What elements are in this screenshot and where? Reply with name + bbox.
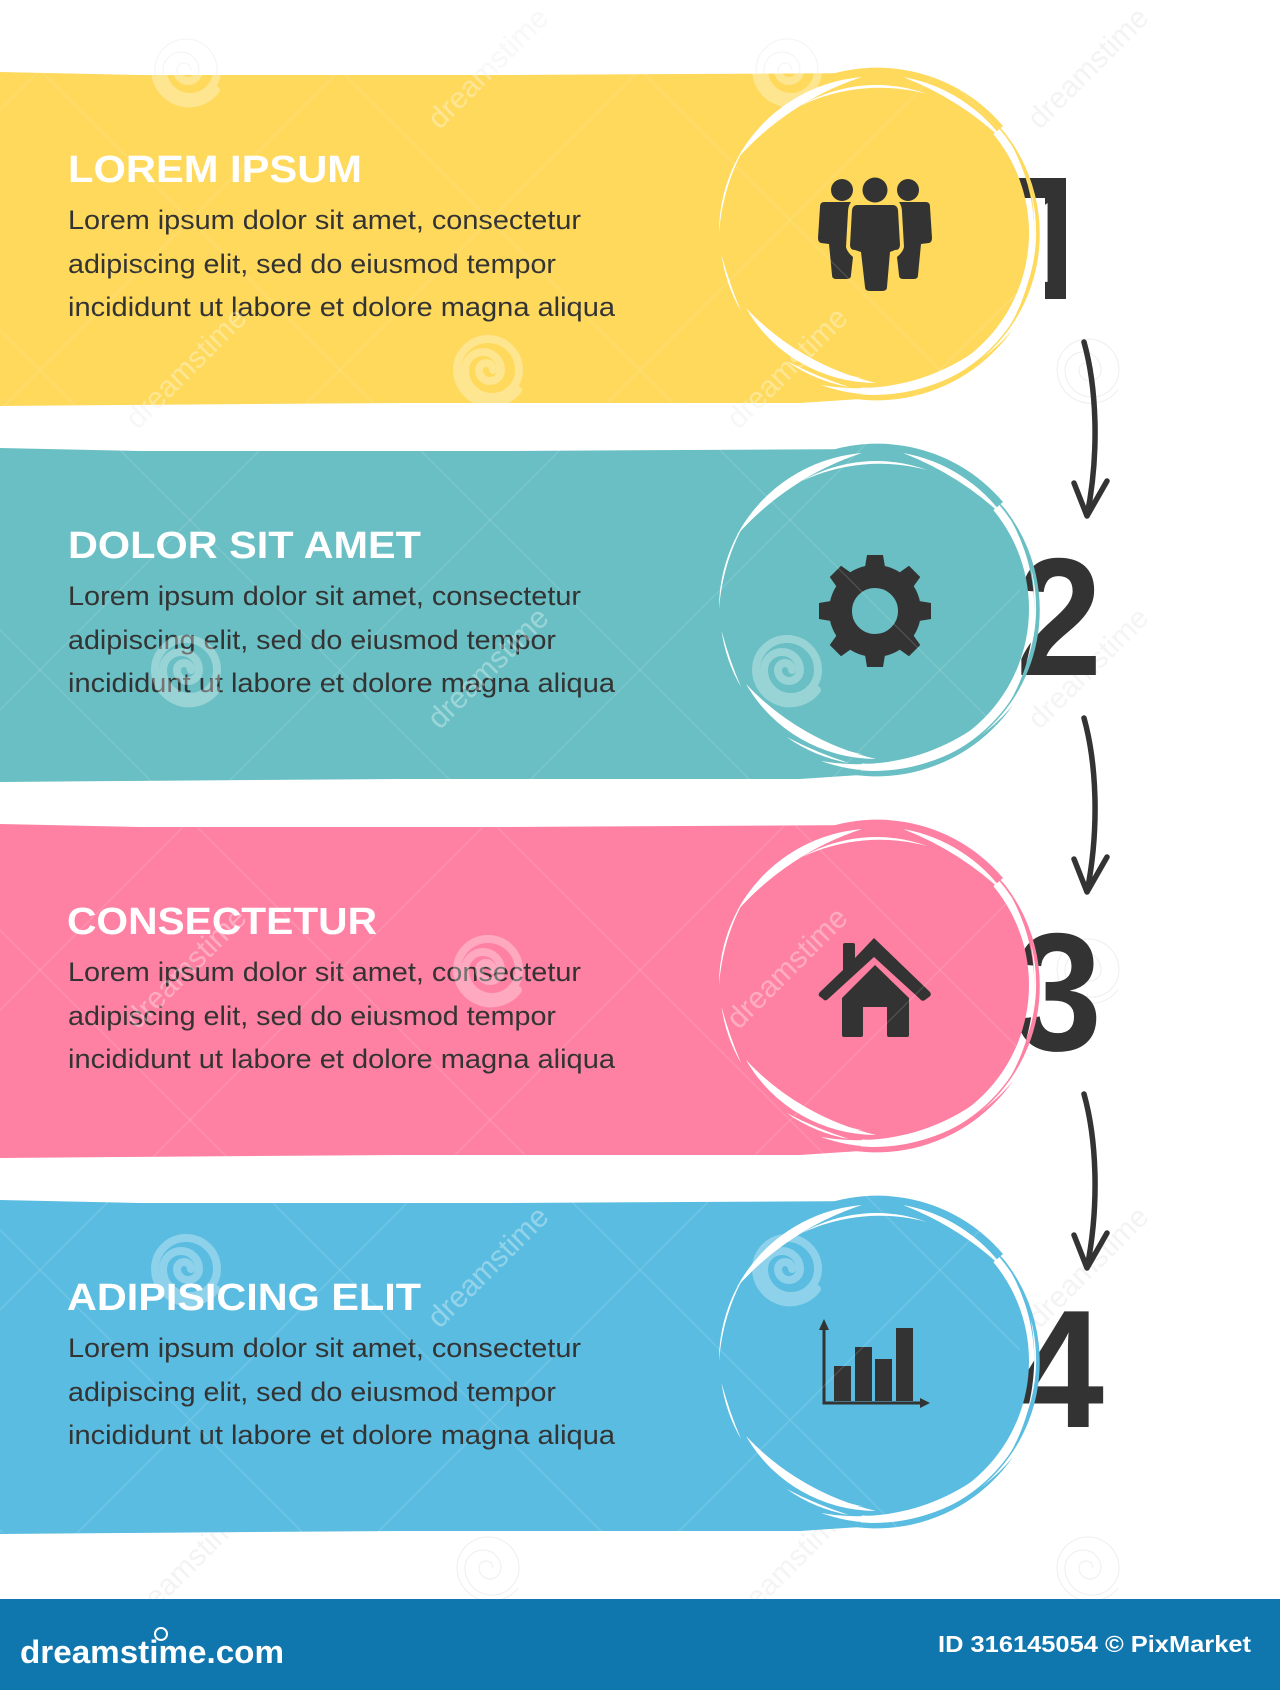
watermark layer on white: dreamstime [119, 301, 253, 435]
watermark layer on colour: dreamstime [421, 1200, 555, 1334]
body text: incididunt ut labore et dolore magna aliqua [68, 1420, 616, 1450]
panel: adipisicing elit [0, 1196, 1104, 1534]
body text: adipiscing elit, sed do eiusmod tempor [68, 1001, 556, 1031]
watermark layer on colour: dreamstime [421, 1, 555, 135]
watermark layer on white: dreamstime [1021, 1200, 1155, 1334]
panel: lorem ipsum [0, 68, 1094, 406]
icon: bar chart [819, 1319, 930, 1408]
body text: incididunt ut labore et dolore magna aliqua [68, 292, 616, 322]
panel: consectetur [0, 820, 1102, 1158]
watermark layer on colour: dreamstime [119, 901, 253, 1035]
circle outline [715, 68, 1039, 400]
body text: incididunt ut labore et dolore magna aliqua [68, 668, 616, 698]
body text: incididunt ut labore et dolore magna aliqua [68, 1044, 616, 1074]
number 1: 1 [1014, 147, 1094, 335]
watermark layer on white [119, 1, 1155, 1633]
icon: house [819, 938, 931, 1037]
circle outline [715, 1196, 1039, 1528]
number 3: 3 [1014, 898, 1102, 1086]
heading: LOREM IPSUM [68, 149, 362, 191]
body text: Lorem ipsum dolor sit amet, consectetur [68, 581, 581, 611]
icon: gear [819, 555, 931, 667]
band [0, 448, 870, 782]
heading: ADIPISICING ELIT [67, 1277, 421, 1319]
body text: adipiscing elit, sed do eiusmod tempor [68, 249, 556, 279]
band [0, 72, 870, 406]
circle outline [715, 820, 1039, 1152]
heading: DOLOR SIT AMET [68, 525, 421, 567]
band [0, 824, 870, 1158]
watermark layer on colour: dreamstime [119, 301, 253, 435]
watermark layer on white: dreamstime [119, 1499, 253, 1633]
watermark layer on colour: dreamstime [720, 301, 854, 435]
body text: Lorem ipsum dolor sit amet, consectetur [68, 205, 581, 235]
watermark layer on white: dreamstime [421, 1, 555, 135]
circle outline [715, 444, 1039, 776]
body text: adipiscing elit, sed do eiusmod tempor [68, 625, 556, 655]
watermark layer on colour: dreamstime [720, 901, 854, 1035]
arrow 3 to 4 [1074, 1094, 1107, 1268]
footer logo: dreamstime.com [20, 1634, 284, 1670]
watermark layer on white: dreamstime [720, 301, 854, 435]
footer spiral [155, 1628, 167, 1640]
arrow 1 to 2 [1074, 342, 1107, 516]
watermark layer on white: dreamstime [1021, 1, 1155, 135]
number 2: 2 [1016, 523, 1102, 711]
watermark layer on colour [0, 1, 1020, 1533]
number 4: 4 [1016, 1275, 1104, 1463]
body text: adipiscing elit, sed do eiusmod tempor [68, 1377, 556, 1407]
panel: dolor sit amet [0, 444, 1102, 782]
body text: Lorem ipsum dolor sit amet, consectetur [68, 1333, 581, 1363]
body text [68, 1333, 616, 1450]
number 1 [1019, 178, 1066, 299]
body text [68, 581, 616, 698]
icon: people [818, 178, 932, 291]
band [0, 1200, 870, 1534]
body text [68, 957, 616, 1074]
footer id: ID 316145054 © PixMarket [938, 1631, 1251, 1657]
arrow 2 to 3 [1074, 718, 1107, 892]
heading: CONSECTETUR [67, 901, 377, 943]
footer bar [0, 1599, 1280, 1690]
body text [68, 205, 616, 322]
watermark layer on white: dreamstime [1021, 601, 1155, 735]
watermark layer on colour: dreamstime [421, 601, 555, 735]
watermark layer on white: dreamstime [720, 1499, 854, 1633]
body text: Lorem ipsum dolor sit amet, consectetur [68, 957, 581, 987]
